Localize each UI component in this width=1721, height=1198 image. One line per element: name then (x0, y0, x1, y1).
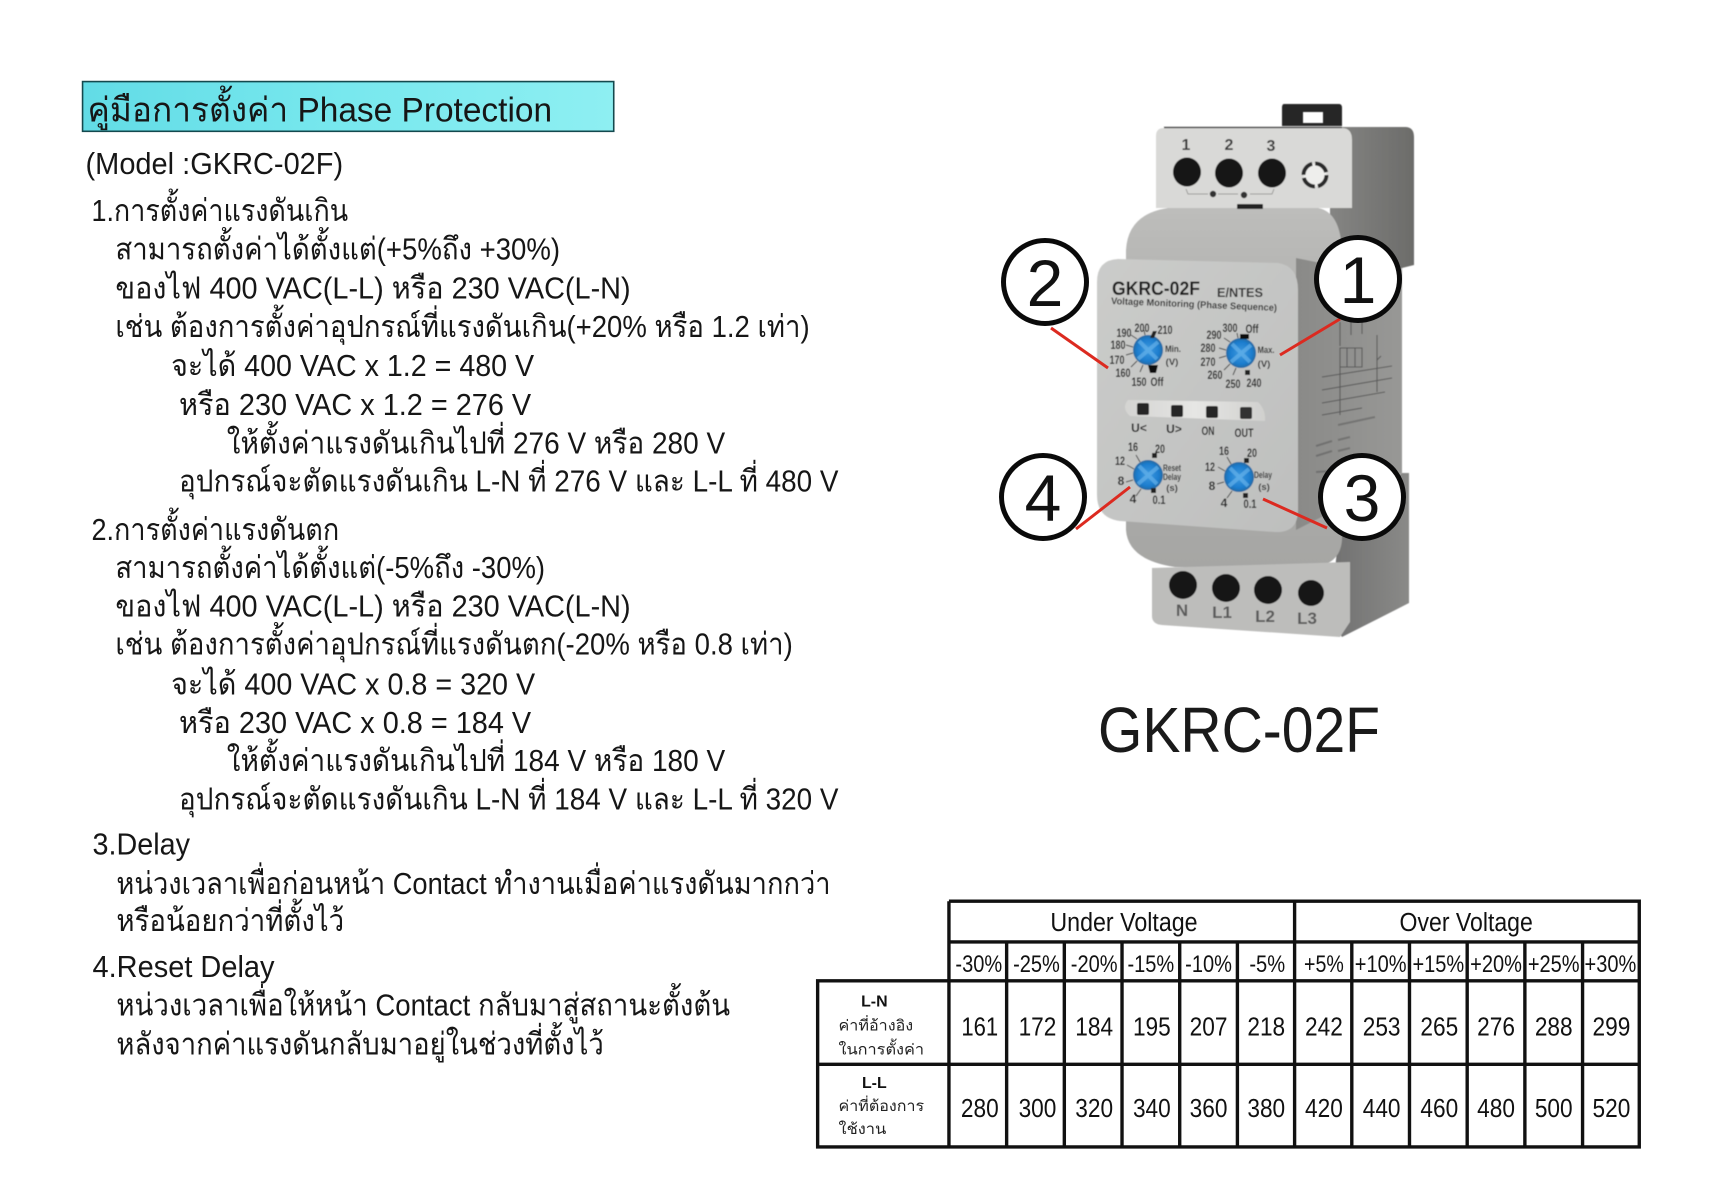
L-N values: 242 (1305, 1013, 1343, 1041)
percent row: -5% (1249, 951, 1285, 978)
L-L values: 280 (961, 1095, 999, 1123)
knob 2: min voltage: 150 (1132, 375, 1147, 389)
callout line 3 (1263, 499, 1327, 528)
knob 4: reset delay: 8 (1118, 474, 1125, 488)
bottom terminal labels: L1 (1212, 603, 1232, 622)
side body middle (1296, 258, 1402, 530)
side body lower (1330, 473, 1409, 637)
knob 2: min voltage: 160 (1116, 366, 1131, 380)
knob 4: reset delay: Delay (1163, 472, 1182, 483)
knob 3: delay: 12 (1205, 460, 1215, 474)
section 1: over voltage setting: อุปกรณ์จะตัดแรงดันเกิน L-N ที่ 276 V และ L-L ที่ 480 V (179, 459, 839, 500)
knob 4: reset delay: 12 (1115, 454, 1125, 468)
section 2: under voltage setting: อุปกรณ์จะตัดแรงดันเกิน L-N ที่ 184 V และ L-L ที่ 320 V (179, 778, 839, 819)
L-L values: 360 (1190, 1095, 1227, 1123)
percent row: -10% (1185, 951, 1232, 978)
percent row: +5% (1304, 951, 1344, 978)
top terminal numbers: 3 (1267, 138, 1276, 155)
section 1: over voltage setting: 1.การตั้งค่าแรงดันเกิน (92, 188, 348, 228)
knob 3: delay: 0.1 (1244, 497, 1257, 511)
callout circle 1 (1316, 238, 1400, 320)
knob 3: delay: (s) (1258, 482, 1270, 493)
L-N values (961, 1013, 1630, 1041)
status LEDs: U< (1131, 421, 1147, 435)
product name on face: GKRC-02F (1112, 278, 1200, 300)
status LEDs: OUT (1234, 426, 1254, 440)
percent row (955, 951, 1636, 978)
percent row: -20% (1071, 951, 1118, 978)
knob 3: delay (1205, 444, 1273, 511)
knob 4: reset delay: (s) (1166, 483, 1178, 494)
front face (1097, 259, 1298, 532)
section 4: reset delay (93, 949, 730, 1062)
L-L values: 420 (1305, 1095, 1343, 1123)
top terminal numbers: 2 (1225, 137, 1234, 154)
top terminal numbers (1182, 137, 1276, 155)
knob 1: max voltage: 260 (1208, 368, 1223, 382)
knob 3: delay: 4 (1221, 496, 1228, 510)
L-N row header: L-N (861, 994, 888, 1011)
section 2: under voltage setting: หรือ 230 VAC x 0.8 = 184 V (179, 705, 532, 740)
knob 3: delay: 20 (1247, 446, 1257, 460)
L-N values: 184 (1075, 1013, 1113, 1041)
title banner: คู่มือการตั้งค่า Phase Protection (88, 85, 552, 130)
percent row: -15% (1127, 951, 1174, 978)
section 1: over voltage setting: ให้ตั้งค่าแรงดันเกินไปที่ 276 V หรือ 280 V (227, 421, 726, 461)
brand logo: E/NTES (1217, 285, 1263, 300)
L-L values: 480 (1477, 1095, 1515, 1123)
callout line 1 (1280, 319, 1340, 355)
section 1: over voltage setting: สามารถตั้งค่าได้ตั้งแต่(+5%ถึง +30%) (115, 227, 560, 267)
percent row: +20% (1470, 951, 1522, 978)
knob 1: max voltage: (V) (1258, 359, 1270, 370)
percent row: +30% (1585, 951, 1636, 978)
section 1: over voltage setting (92, 188, 839, 500)
L-N values: 276 (1477, 1013, 1515, 1041)
section 1: over voltage setting: ของไฟ 400 VAC(L-L) หรือ 230 VAC(L-N) (115, 270, 631, 305)
section 2: under voltage setting: ให้ตั้งค่าแรงดันเกินไปที่ 184 V หรือ 180 V (227, 738, 726, 778)
L-N values: 207 (1190, 1013, 1227, 1041)
knob 2: min voltage: 170 (1110, 353, 1125, 367)
text column (83, 82, 839, 1062)
L-L values: 300 (1019, 1095, 1056, 1123)
top terminal holes (1173, 158, 1326, 198)
top terminal block (1156, 128, 1352, 208)
knob 2: min voltage: Min. (1165, 344, 1181, 355)
callout circle 1: 1 (1340, 243, 1376, 317)
L-L values (961, 1095, 1630, 1123)
section 2: under voltage setting: 2.การตั้งค่าแรงดันตก (92, 507, 339, 547)
L-L row header: L-L (862, 1075, 887, 1092)
knob 2: min voltage: 180 (1110, 338, 1126, 352)
wiring diagram on side (1316, 322, 1392, 472)
callout circle 3: 3 (1344, 461, 1380, 535)
percent row: -30% (955, 951, 1002, 978)
status LEDs (1125, 400, 1265, 440)
percent row: +10% (1355, 951, 1407, 978)
L-L values: 440 (1363, 1095, 1401, 1123)
section 2: under voltage setting: จะได้ 400 VAC x 0.8 = 320 V (171, 666, 536, 701)
voltage table (818, 901, 1639, 1147)
knob 4: reset delay: 20 (1155, 442, 1165, 456)
section 2: under voltage setting (92, 507, 839, 819)
section 3: delay (93, 826, 831, 938)
L-N row header (839, 994, 924, 1058)
knob 4: reset delay: Reset (1163, 463, 1182, 474)
L-N values: 172 (1019, 1013, 1056, 1041)
knob 1: max voltage: 250 (1226, 377, 1241, 391)
knob 2: min voltage: Off (1150, 375, 1164, 389)
model line: (Model :GKRC-02F) (86, 146, 343, 181)
knob 4: reset delay: 4 (1130, 492, 1137, 506)
section 1: over voltage setting: จะได้ 400 VAC x 1.2 = 480 V (171, 348, 535, 383)
knob 1: max voltage (1200, 321, 1274, 391)
L-L row header: ใช้งาน (839, 1120, 886, 1138)
title banner (83, 82, 614, 131)
L-N values: 161 (961, 1013, 998, 1041)
group headers: Under Voltage (1050, 909, 1198, 937)
section 1: over voltage setting: เช่น ต้องการตั้งค่าอุปกรณ์ที่แรงดันเกิน(+20% หรือ 1.2 เท่า) (115, 304, 810, 346)
L-L values: 340 (1133, 1095, 1171, 1123)
knob 4: reset delay (1115, 440, 1182, 507)
L-L values: 380 (1247, 1095, 1285, 1123)
knob 3: delay: Delay (1254, 470, 1273, 481)
knob 4: reset delay: 16 (1128, 440, 1138, 454)
L-L values: 520 (1593, 1095, 1630, 1123)
L-L values: 460 (1420, 1095, 1458, 1123)
knob 3: delay: 8 (1209, 479, 1216, 493)
knob 2: min voltage: 190 (1116, 326, 1132, 340)
knob 2: min voltage (1110, 321, 1181, 389)
knob 4: reset delay: 0.1 (1152, 493, 1166, 507)
subtitle on face: Voltage Monitoring (Phase Sequence) (1111, 296, 1277, 314)
percent row: +15% (1412, 951, 1464, 978)
bottom terminal block (1152, 562, 1350, 637)
product model caption: GKRC-02F (1098, 694, 1380, 766)
callout circle 3 (1320, 456, 1404, 538)
group headers: Over Voltage (1400, 909, 1533, 937)
status LEDs: ON (1202, 424, 1214, 438)
knob 1: max voltage: Off (1246, 322, 1259, 336)
callout circle 2: 2 (1027, 246, 1063, 320)
L-N values: 288 (1535, 1013, 1573, 1041)
middle housing (1126, 208, 1342, 567)
status LEDs: U> (1166, 422, 1182, 436)
section 3: delay: 3.Delay (93, 826, 191, 861)
bottom terminal labels (1176, 601, 1317, 628)
top terminal numbers: 1 (1182, 137, 1191, 154)
knob 1: max voltage: 240 (1246, 376, 1262, 390)
knob 3: delay: 16 (1219, 444, 1229, 458)
knob 1: max voltage: 290 (1206, 328, 1222, 342)
bottom terminal labels: N (1176, 601, 1188, 620)
knob 1: max voltage: 270 (1200, 355, 1216, 369)
section 1: over voltage setting: หรือ 230 VAC x 1.2 = 276 V (179, 387, 532, 422)
L-N row header: ในการตั้งค่า (839, 1038, 924, 1058)
side body upper (1330, 127, 1414, 300)
L-N values: 218 (1247, 1013, 1285, 1041)
callout circle 4 (1002, 456, 1084, 538)
din clip (1282, 104, 1342, 126)
section 4: reset delay: หน่วงเวลาเพื่อให้หน้า Contact กลับมาสู่สถานะตั้งต้น (116, 983, 730, 1024)
bottom terminal labels: L2 (1255, 607, 1275, 626)
L-N values: 253 (1363, 1013, 1401, 1041)
section 4: reset delay: 4.Reset Delay (93, 949, 275, 984)
housing clip (1237, 204, 1263, 209)
L-N row header: ค่าที่อ้างอิง (839, 1015, 913, 1035)
callout circle 2 (1004, 240, 1086, 324)
group headers (1050, 909, 1533, 937)
knob 1: max voltage: 280 (1200, 341, 1216, 355)
percent row: -25% (1013, 951, 1060, 978)
knob 1: max voltage: 300 (1222, 321, 1238, 335)
knob 2: min voltage: (V) (1166, 357, 1178, 368)
table grid (818, 901, 1639, 1147)
L-N values: 299 (1593, 1013, 1630, 1041)
section 2: under voltage setting: ของไฟ 400 VAC(L-L) หรือ 230 VAC(L-N) (115, 589, 631, 624)
L-L values: 320 (1075, 1095, 1113, 1123)
top edge shadow (1164, 126, 1342, 128)
knob 2: min voltage: 200 (1134, 321, 1150, 335)
callout line 2 (1051, 328, 1108, 368)
section 4: reset delay: หลังจากค่าแรงดันกลับมาอยู่ในช่วงที่ตั้งไว้ (116, 1021, 604, 1062)
section 2: under voltage setting: สามารถตั้งค่าได้ตั้งแต่(-5%ถึง -30%) (115, 545, 545, 585)
L-N values: 195 (1133, 1013, 1171, 1041)
knob 2: min voltage: 210 (1158, 323, 1173, 337)
L-N values: 265 (1420, 1013, 1458, 1041)
bottom terminal holes (1169, 571, 1324, 606)
L-L row header (839, 1075, 924, 1138)
L-L values: 500 (1535, 1095, 1573, 1123)
callout line 4 (1076, 487, 1130, 529)
knob 1: max voltage: Max. (1258, 345, 1274, 356)
section 3: delay: หรือน้อยกว่าที่ตั้งไว้ (116, 898, 344, 938)
section 3: delay: หน่วงเวลาเพื่อก่อนหน้า Contact ทำงานเมื่อค่าแรงดันมากกว่า (116, 862, 831, 901)
percent row: +25% (1528, 951, 1580, 978)
L-L row header: ค่าที่ต้องการ (839, 1095, 924, 1115)
device photo illustration (1097, 104, 1414, 637)
bottom terminal labels: L3 (1297, 609, 1317, 628)
callout circle 4: 4 (1025, 461, 1061, 535)
section 2: under voltage setting: เช่น ต้องการตั้งค่าอุปกรณ์ที่แรงดันตก(-20% หรือ 0.8 เท่า) (115, 622, 793, 664)
